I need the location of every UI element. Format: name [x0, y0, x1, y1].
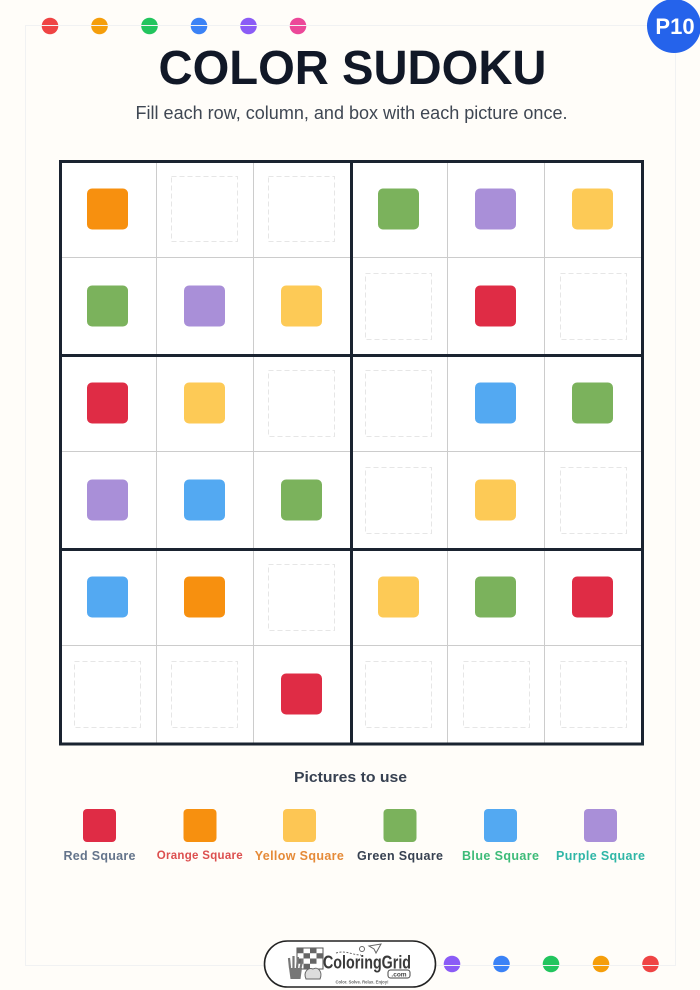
- page badge: [647, 0, 700, 53]
- legend heading: Pictures to use: [294, 769, 407, 786]
- legend item: purple: Purple Square: [556, 849, 645, 863]
- legend item: green: [357, 809, 443, 863]
- legend item: blue: [462, 809, 539, 863]
- logo icon: grid and plant: [289, 948, 323, 979]
- legend item: red: Red Square: [64, 849, 136, 863]
- legend item: blue: Blue Square: [462, 849, 539, 863]
- legend item: yellow: [255, 809, 344, 863]
- legend item: green: Green Square: [357, 849, 443, 863]
- legend item: red: [64, 809, 136, 863]
- sudoku grid: [60, 162, 643, 744]
- logo paper plane: [336, 944, 381, 955]
- top decorative dots: [42, 18, 306, 34]
- page badge: P10: [655, 14, 695, 39]
- legend item: orange: [157, 809, 243, 862]
- filled squares: [87, 188, 613, 714]
- grid heavy lines: [60, 162, 643, 744]
- logo .com: [388, 970, 410, 978]
- legend: [64, 809, 645, 863]
- legend item: purple: [556, 809, 645, 863]
- logo tagline: Color. Solve. Relax. Enjoy!: [336, 980, 389, 984]
- subtitle: Fill each row, column, and box with each picture once.: [136, 103, 568, 123]
- logo .com: .com: [391, 972, 407, 978]
- logo wordmark: ColoringGrid: [323, 952, 411, 972]
- legend item: yellow: Yellow Square: [255, 849, 344, 863]
- legend item: orange: Orange Square: [157, 850, 243, 862]
- logo pill: [264, 941, 436, 987]
- title: COLOR SUDOKU: [158, 42, 546, 95]
- empty cell placeholders: [74, 176, 626, 728]
- bottom decorative dots: [444, 956, 659, 972]
